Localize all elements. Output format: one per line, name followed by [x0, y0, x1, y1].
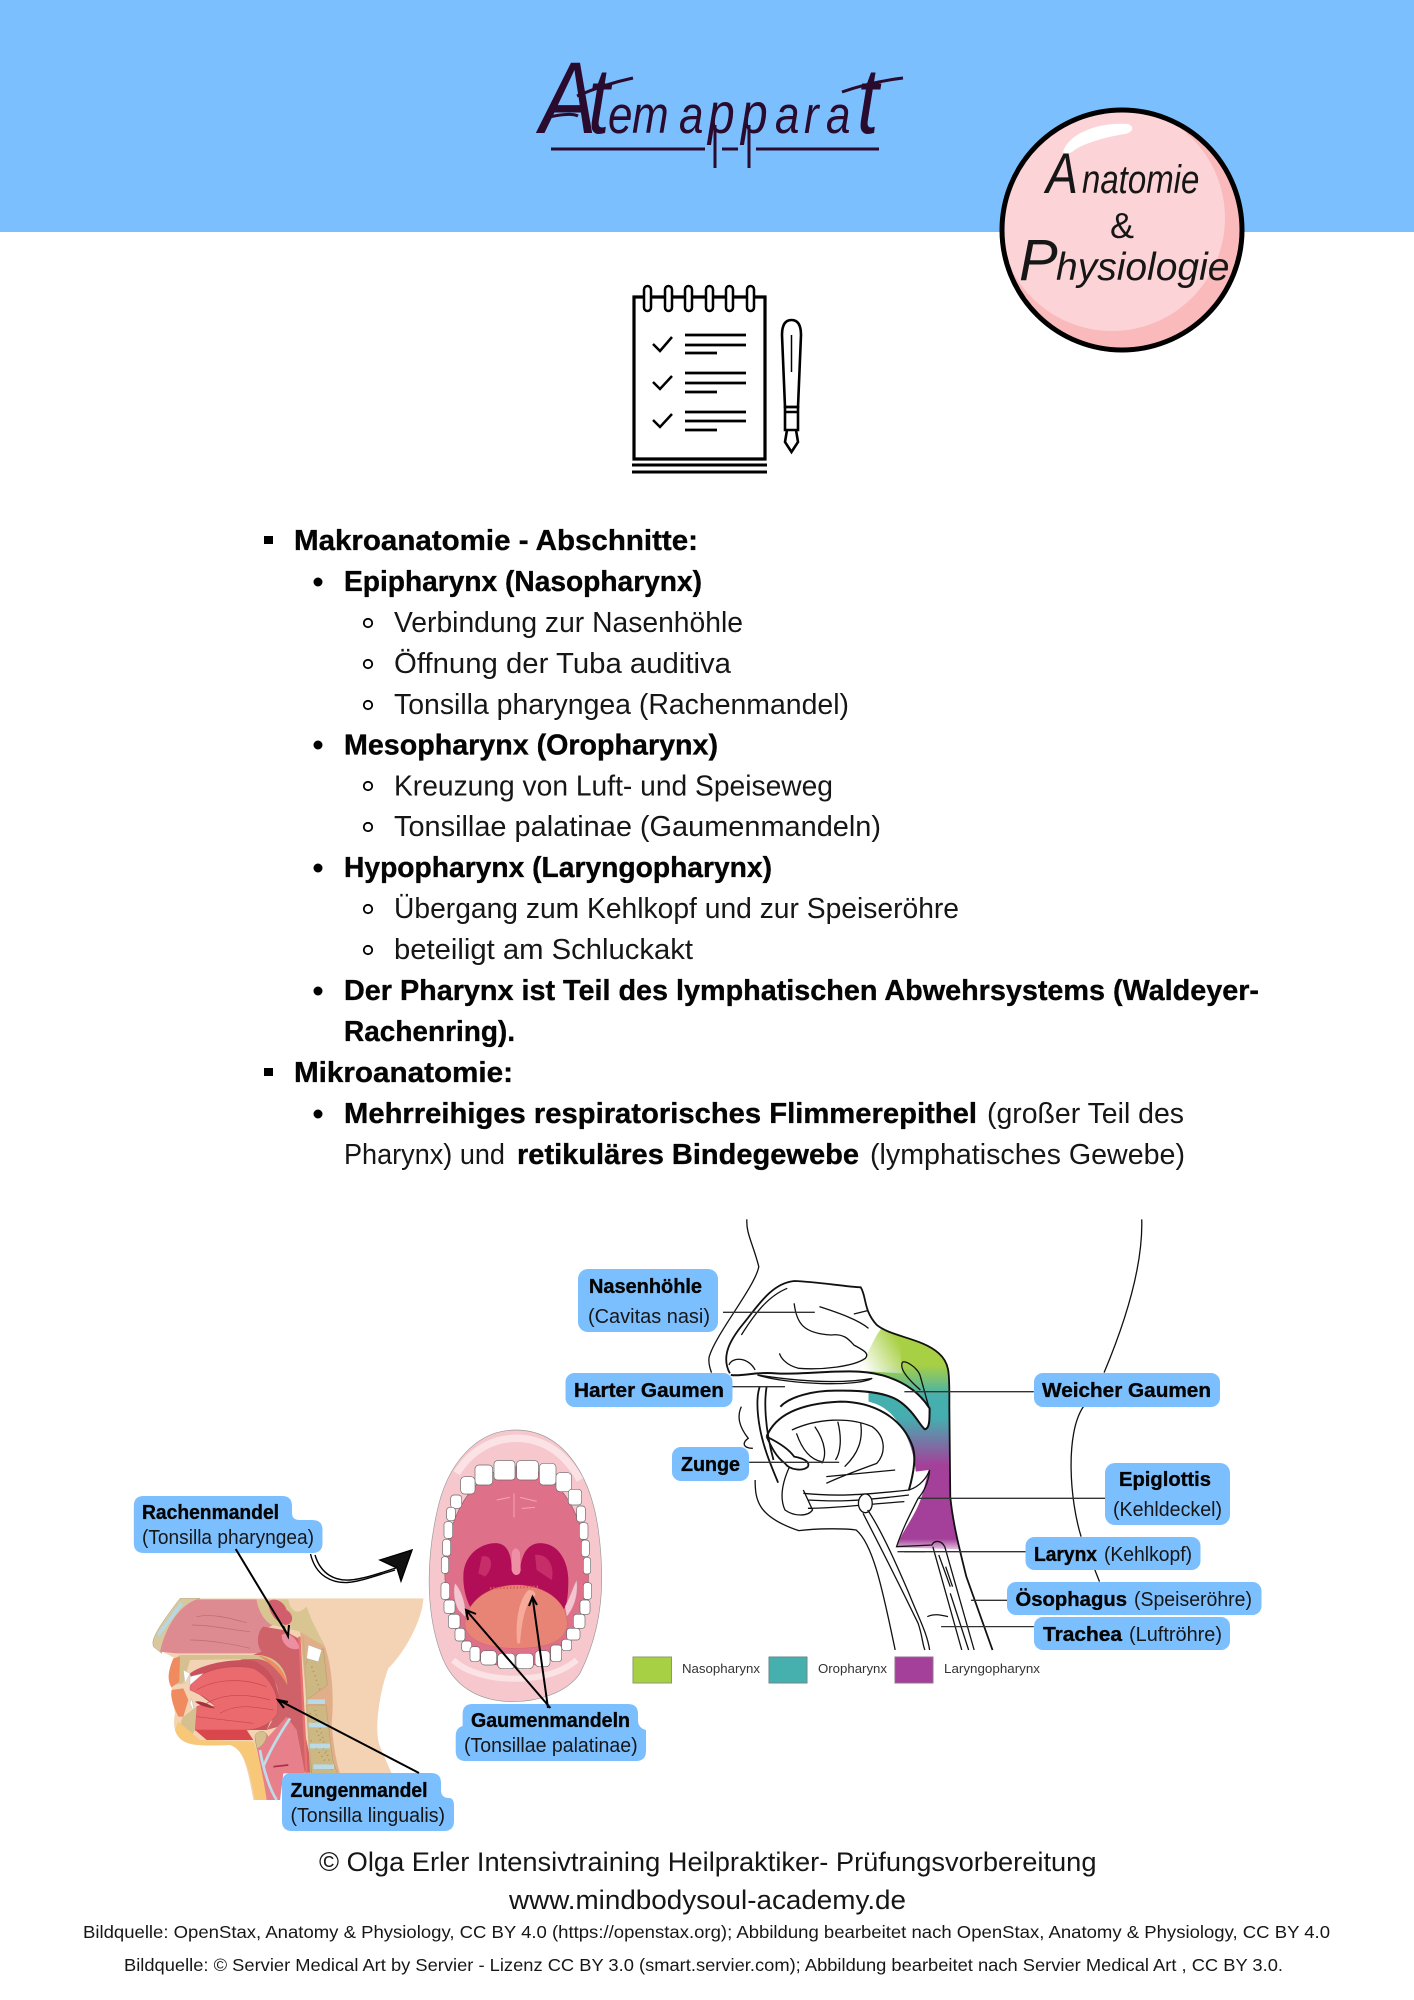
list item: Hypopharynx: Hypopharynx (Laryngopharynx)	[344, 852, 772, 884]
list item: Epipharynx: Epipharynx (Nasopharynx)	[344, 566, 702, 598]
footer: copyright	[319, 1847, 1096, 1915]
label: Zunge	[672, 1447, 749, 1481]
title: a	[679, 86, 703, 145]
list item: Flimmerepithel: Mehrreihiges respiratorisches Flimmerepithel	[344, 1098, 977, 1130]
title: m	[632, 86, 669, 145]
palate and soft palate	[731, 1371, 930, 1429]
label: Nasenhöhle: (Cavitas nasi)	[588, 1306, 710, 1328]
leader lines	[723, 1312, 1105, 1627]
palate white	[835, 1372, 930, 1429]
footer: image sources: Bildquelle: OpenStax, Anatomy & Physiology, CC BY 4.0 (https://openstax.org); Abbildung bearbeitet nach OpenStax, Anatomy & Physiology, CC BY 4.0	[83, 1922, 1330, 1942]
label: Trachea: Trachea	[1043, 1624, 1123, 1646]
label: Larynx: (Kehlkopf)	[1104, 1544, 1192, 1566]
pharyngeal tonsil	[268, 1600, 292, 1625]
throat	[463, 1543, 568, 1610]
arrows: tonsil pointers	[236, 1549, 550, 1773]
title	[535, 41, 903, 168]
list item: Epipharynx	[314, 566, 849, 721]
list item: Mesopharynx	[314, 730, 881, 843]
list item: Mesopharynx: Kreuzung von Luft- und Speiseweg	[394, 770, 833, 802]
title: e	[608, 86, 632, 145]
label: Zungenmandel: (Tonsilla lingualis)	[290, 1805, 445, 1827]
icon: notepad with checklist	[632, 286, 767, 472]
badge: Anatomie & Physiologie: natomie	[1082, 157, 1199, 202]
label: Trachea: (Luftröhre)	[1129, 1624, 1222, 1646]
label: Rachenmandel: (Tonsilla pharyngea)	[142, 1527, 314, 1549]
uvula	[512, 1548, 521, 1575]
skin	[153, 1598, 423, 1800]
badge: Anatomie & Physiologie: &	[1110, 205, 1134, 246]
list item: Epipharynx: Öffnung der Tuba auditiva	[394, 648, 732, 680]
label: Zungenmandel: Zungenmandel	[290, 1780, 428, 1802]
title: A	[535, 41, 597, 155]
outer profile lines	[709, 1219, 1142, 1650]
label: Ösophagus: Ösophagus	[1016, 1588, 1127, 1611]
title: p	[706, 82, 735, 146]
spine	[305, 1648, 337, 1773]
list item: Flimmerepithel: (lymphatisches Gewebe)	[870, 1139, 1185, 1171]
label: Epiglottis: Epiglottis	[1119, 1469, 1211, 1491]
label: Harter Gaumen	[566, 1373, 732, 1407]
nose tip and bone	[153, 1598, 200, 1653]
diagram: sagittal section of pharynx	[709, 1219, 1142, 1650]
illustration: head cross-section	[153, 1598, 423, 1800]
oral cavity	[190, 1660, 279, 1730]
label: Zunge: Zunge	[681, 1454, 740, 1476]
list item: Hypopharynx: Übergang zum Kehlkopf und zur Speiseröhre	[394, 893, 959, 925]
label: Weicher Gaumen	[1034, 1373, 1220, 1407]
tonsils	[454, 1580, 577, 1617]
legend	[633, 1657, 1041, 1683]
list item: Flimmerepithel: (großer Teil des	[987, 1098, 1184, 1130]
label: Gaumenmandeln	[456, 1704, 646, 1761]
arrow: curved to mouth	[310, 1550, 412, 1583]
skull base tan	[257, 1599, 325, 1647]
illustration: open mouth	[429, 1430, 602, 1702]
hard palate	[170, 1655, 287, 1685]
list item: Hypopharynx: beteiligt am Schluckakt	[394, 934, 693, 966]
teeth	[183, 1670, 203, 1715]
list item: Hypopharynx	[314, 852, 959, 966]
lips	[429, 1430, 602, 1702]
list item: Mesopharynx: Tonsillae palatinae (Gaumenmandeln)	[394, 811, 881, 843]
label: Trachea	[1034, 1617, 1230, 1650]
nasal cavity outline	[726, 1281, 993, 1650]
label: Nasenhöhle: Nasenhöhle	[589, 1276, 702, 1298]
footer: copyright: © Olga Erler Intensivtraining Heilpraktiker- Prüfungsvorbereitung	[319, 1847, 1096, 1877]
text list: pharynx anatomy	[264, 525, 1259, 1171]
footer: copyright: www.mindbodysoul-academy.de	[508, 1885, 906, 1915]
footer: image sources: Bildquelle: © Servier Medical Art by Servier - Lizenz CC BY 3.0 (smart.servier.com); Abbildung bearbeitet nach Servier Medical Art , CC BY 3.0.	[124, 1955, 1283, 1975]
lower lip and jaw	[171, 1688, 188, 1717]
section: Mikroanatomie heading: Mikroanatomie:	[294, 1057, 513, 1089]
title: p	[739, 82, 768, 146]
label: Epiglottis	[1105, 1463, 1230, 1525]
label: Rachenmandel	[134, 1496, 322, 1553]
adenoid	[282, 1634, 299, 1649]
title: a	[775, 86, 799, 145]
tongue	[767, 1402, 914, 1490]
title: r	[804, 86, 820, 145]
list item: Epipharynx: Verbindung zur Nasenhöhle	[394, 607, 743, 639]
green fade	[858, 1328, 902, 1373]
badge: Anatomie & Physiologie	[999, 105, 1242, 350]
list item: Mesopharynx: Mesopharynx (Oropharynx)	[344, 730, 718, 762]
palate	[445, 1467, 588, 1666]
legend: Laryngopharynx	[944, 1661, 1041, 1676]
pharynx	[240, 1627, 313, 1773]
title flourishes	[545, 78, 903, 168]
label: Rachenmandel: Rachenmandel	[142, 1502, 279, 1524]
list item: Waldeyer-Rachenring	[314, 975, 1259, 1048]
jaw and hyoid	[782, 1467, 945, 1547]
chin fat	[175, 1722, 268, 1800]
label: Nasenhöhle	[578, 1269, 718, 1332]
label: Harter Gaumen: Harter Gaumen	[574, 1380, 724, 1402]
list item: Epipharynx: Tonsilla pharyngea (Rachenmandel)	[394, 689, 849, 721]
legend: Nasopharynx	[682, 1661, 760, 1676]
tongue	[465, 1585, 567, 1648]
title: a	[826, 86, 850, 145]
section: Makroanatomie heading: Makroanatomie - Abschnitte:	[294, 525, 698, 557]
larynx	[255, 1717, 305, 1800]
label: Larynx: Larynx	[1034, 1544, 1097, 1566]
list item: Waldeyer-Rachenring: Der Pharynx ist Teil des lymphatischen Abwehrsystems (Waldeyer-	[344, 975, 1259, 1007]
list item: Flimmerepithel	[314, 1098, 1185, 1171]
tongue	[190, 1667, 278, 1730]
trachea and oesophagus	[863, 1510, 974, 1650]
label: Gaumenmandeln: (Tonsillae palatinae)	[464, 1735, 638, 1757]
pharynx colour region	[858, 1328, 960, 1549]
icon: fountain pen	[782, 320, 801, 452]
title: t	[588, 49, 612, 154]
label: Ösophagus	[1007, 1582, 1262, 1615]
teeth	[441, 1461, 592, 1669]
label: Larynx	[1026, 1537, 1200, 1570]
list item: Waldeyer-Rachenring: Rachenring).	[344, 1016, 515, 1048]
nasal cavity	[160, 1599, 273, 1653]
header band	[0, 0, 1414, 232]
label: Ösophagus: (Speiseröhre)	[1134, 1589, 1252, 1611]
badge: Anatomie & Physiologie: hysiologie	[1056, 246, 1229, 289]
badge: Anatomie & Physiologie: A	[1043, 142, 1078, 206]
list item: Flimmerepithel: Pharynx) und	[344, 1139, 505, 1171]
label: Zungenmandel	[282, 1773, 454, 1831]
label: Epiglottis: (Kehldeckel)	[1113, 1499, 1222, 1521]
badge: Anatomie & Physiologie: P	[1019, 228, 1058, 293]
legend: Oropharynx	[818, 1661, 888, 1676]
list item: Flimmerepithel: retikuläres Bindegewebe	[517, 1139, 859, 1171]
footer: image sources	[83, 1922, 1330, 1975]
label: Weicher Gaumen: Weicher Gaumen	[1042, 1380, 1211, 1402]
label: Gaumenmandeln: Gaumenmandeln	[471, 1710, 630, 1732]
title: t	[857, 49, 881, 154]
